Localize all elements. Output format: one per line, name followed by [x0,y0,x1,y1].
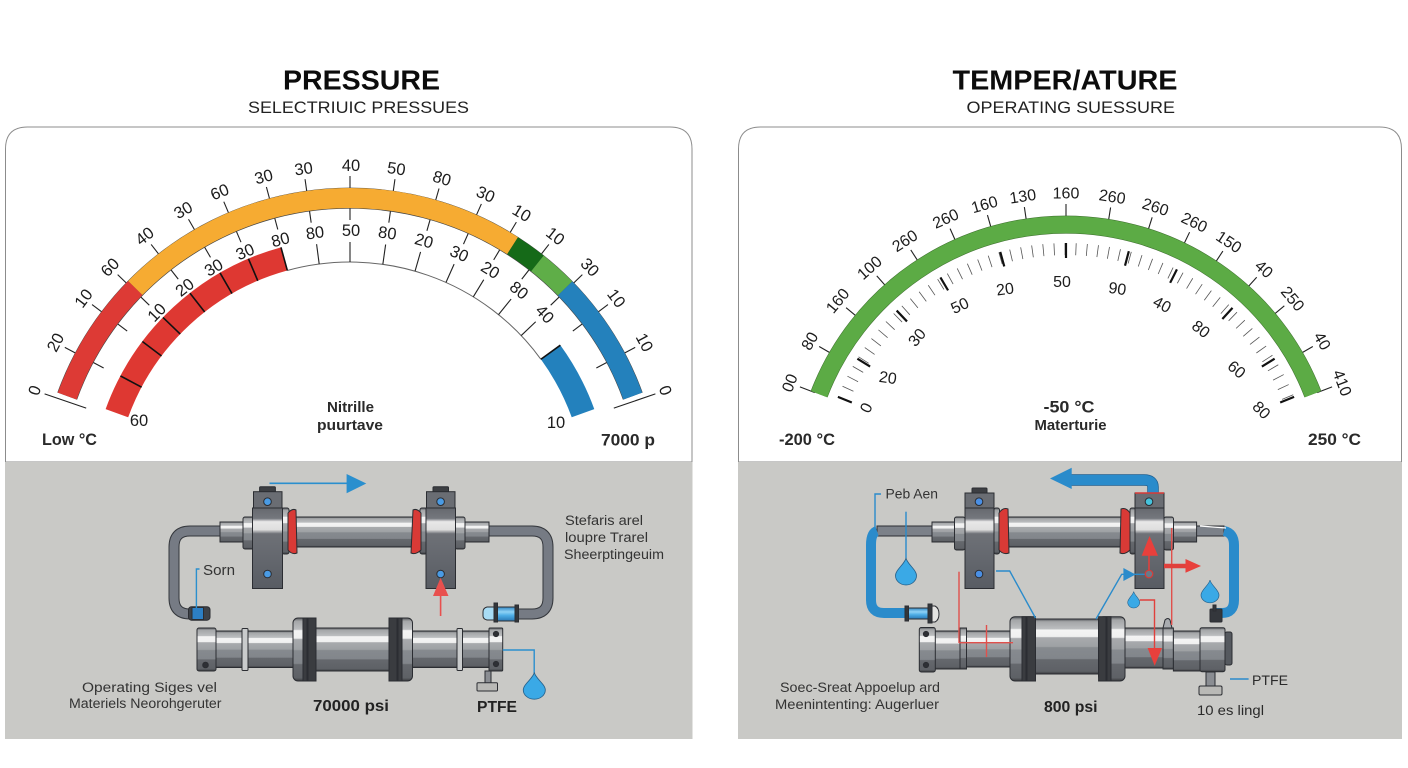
inner ticks [120,247,560,387]
inner scale labels: 60 [1224,358,1248,382]
valve knob [1199,672,1222,695]
inner scale arc [287,262,541,359]
label: steel notes: Stefaris arel [565,513,643,528]
outer band: dark green zone [513,246,537,263]
blue leader lines [996,571,1149,619]
red arrow down [1140,600,1162,666]
outer scale labels: 250 [1277,284,1307,315]
panel background: pressure diagram area [5,462,692,739]
red seal rings [999,508,1130,554]
gauge label: high: 7000 p [601,430,655,450]
inner band end labels: 60 [130,412,148,430]
blue return pipe right [1215,531,1234,613]
inner scale labels: 20 [878,369,898,388]
panel: pressure [5,127,692,739]
outer scale labels: 130 [1008,187,1037,208]
gauge centre label: puurtave [317,417,383,434]
outer band: red zone [67,288,135,396]
outer scale labels [779,186,1354,399]
label: operating notes: Operating Siges vel [82,680,217,695]
title: pressure: PRESSURE [283,64,440,96]
inner scale labels: 80 [506,278,531,303]
outer scale labels: 10 [509,201,534,226]
drain line [503,650,534,673]
inner scale labels: 0 [857,400,877,416]
outer scale labels: 20 [44,330,68,355]
label: 10 es lingl: 10 es lingl [1197,702,1264,718]
gauge label: low: Low °C [42,430,97,449]
gauge label: high: 250 °C [1308,430,1361,449]
inner scale labels: 30 [202,256,226,280]
inner scale labels: 30 [906,326,930,350]
outer scale labels: 410 [1329,368,1354,399]
inner scale labels: 30 [233,240,257,264]
outer scale labels: 260 [1140,196,1171,220]
inner scale labels: 20 [172,275,198,301]
outer scale labels: 00 [779,372,802,395]
top blue return arrow [1050,468,1153,493]
inner scale labels: 50 [342,222,360,240]
left fitting [905,604,939,623]
inner scale labels: 80 [377,223,398,244]
major ticks [838,243,1294,402]
gauge centre label: -50 °C [1044,398,1094,416]
lower cylinder [197,618,503,681]
gauge: pressure [45,176,655,413]
inner scale labels: 20 [995,280,1015,300]
inner band end labels [130,412,565,432]
gauge: temperature [800,204,1332,402]
red seal rings [288,509,421,554]
outer band: orange zone [135,198,513,288]
icon: water drop large [896,558,916,585]
inner scale labels [857,274,1273,423]
gauge label: low: -200 °C [779,430,835,449]
outer scale labels: 260 [1098,187,1127,208]
outer scale labels: 30 [171,198,196,223]
valve knob [477,671,498,691]
outer scale labels: 0 [655,383,675,398]
gauge centre label: Materturie [1034,417,1106,434]
pipe highlight [1200,526,1226,528]
right mounting block [426,487,456,588]
inner band end labels: 10 [547,414,565,432]
inner scale labels: 20 [478,258,503,283]
outer scale labels: 30 [473,183,497,207]
inner scale labels: 80 [1188,318,1213,342]
red pressure arrow [433,578,448,616]
panel background: temperature diagram area [738,462,1402,739]
green band [819,225,1313,394]
upper cylinder [220,508,489,554]
subtitle: pressure: SELECTRIUIC PRESSUES [248,98,469,117]
label: operating notes: Meenintenting: Augerluer [775,697,940,712]
red arrow up [1142,536,1158,578]
label: operating notes: Materiels Neorohgeruter [69,696,222,711]
inner scale labels [144,222,557,327]
outer scale labels: 40 [342,157,360,175]
outer scale labels: 150 [1213,228,1244,257]
label: steel notes: loupre Trarel [565,530,648,545]
outer scale labels: 160 [823,286,853,317]
panel background: pressure gauge area [6,127,692,462]
peb aen leader [875,494,881,528]
label: sorn: Sorn [203,563,235,579]
diagram: temperature piping [775,468,1288,718]
outer scale labels: 260 [1178,210,1210,237]
sorn leader line [196,569,200,608]
label: steel notes [564,513,664,562]
panel: temperature [738,127,1402,739]
inner scale labels: 80 [269,229,292,251]
blue small arrow [1123,568,1136,581]
outer scale labels: 30 [253,166,275,188]
outer scale labels: 160 [1053,186,1079,202]
right mounting block [1135,493,1164,588]
outer scale labels: 30 [577,255,602,281]
outer scale labels: 30 [293,159,314,179]
outer scale labels: 50 [386,159,407,179]
inner scale labels: 40 [532,302,557,327]
inner scale labels: 80 [1248,398,1273,423]
outer scale labels: 80 [799,329,822,353]
icon: water drop [523,672,545,699]
outer scale labels: 10 [542,224,568,249]
diagram: pressure piping [69,474,664,716]
inner scale labels: 40 [1150,294,1174,317]
outer scale labels: 260 [930,206,962,233]
panel background: temperature gauge area [738,127,1402,462]
return pipe left [174,531,221,614]
inner scale labels: 20 [413,230,435,253]
outer scale labels: 60 [98,255,123,281]
outer ticks [45,176,655,408]
subtitle: temperature: OPERATING SUESSURE [966,98,1175,117]
blue flow arrow [270,474,366,493]
lower cylinder [919,617,1232,681]
outer scale labels: 10 [71,286,97,311]
inner thin ticks [317,242,536,336]
outer scale labels: 60 [208,181,232,204]
inner scale labels: 50 [1053,274,1071,291]
title: temperature: TEMPER/ATURE [952,64,1178,96]
outer ticks [800,204,1332,393]
outer scale labels: 80 [430,168,453,190]
label: PTFE: PTFE [477,699,517,716]
minor ticks [844,249,1288,399]
label: peb aen: Peb Aen [886,486,938,502]
gauge centre label: Nitrille [327,399,374,416]
label: 70000 psi: 70000 psi [313,698,389,715]
inner scale labels: 10 [144,300,170,326]
inner scale labels: 30 [447,242,471,266]
green band outline [819,225,1313,394]
inner scale labels: 90 [1107,280,1127,299]
right blue fitting [483,603,518,622]
label: PTFE: PTFE [1252,672,1288,688]
outer scale labels [25,157,675,398]
red arrow right [1164,559,1201,573]
label: steel notes: Sheerptingeuim [564,547,664,562]
red leader lines [959,528,1172,657]
outer band: blue zone [565,288,633,396]
inner scale labels: 80 [305,223,325,243]
outer scale labels: 0 [25,383,45,398]
label: operating notes [775,680,940,712]
outer scale labels: 40 [1251,258,1276,282]
outer band: light green zone [537,263,565,288]
label: operating notes: Soec-Sreat Appoelup ard [780,680,940,695]
outer scale labels: 160 [970,194,1000,217]
inner scale labels: 50 [949,295,972,318]
inner band: blue zone [551,352,583,413]
gray pipe stubs [877,526,1224,536]
drop line [905,512,907,558]
gauge centre label [317,399,383,434]
blue return pipe left [871,531,906,613]
label: 800 psi: 800 psi [1044,699,1098,716]
gauge centre label [1034,398,1106,434]
outer scale labels: 260 [890,227,921,256]
icon: water drop right [1201,580,1219,603]
outer scale labels: 40 [132,224,158,249]
outer band outline [67,198,633,396]
PTFE leader [1230,678,1249,680]
left blue fitting [188,607,210,620]
return pipe right [489,531,548,614]
upper cylinder [932,508,1197,554]
left mounting block [252,487,282,588]
inner band: red zone [117,259,284,413]
icon: water drop small [1128,592,1140,608]
left mounting block [965,488,994,588]
right fitting [1210,605,1222,622]
outer scale labels: 100 [855,253,886,284]
outer scale labels: 10 [632,330,656,355]
outer scale labels: 40 [1310,330,1333,354]
label: operating notes [69,680,222,711]
outer scale labels: 10 [603,286,629,311]
